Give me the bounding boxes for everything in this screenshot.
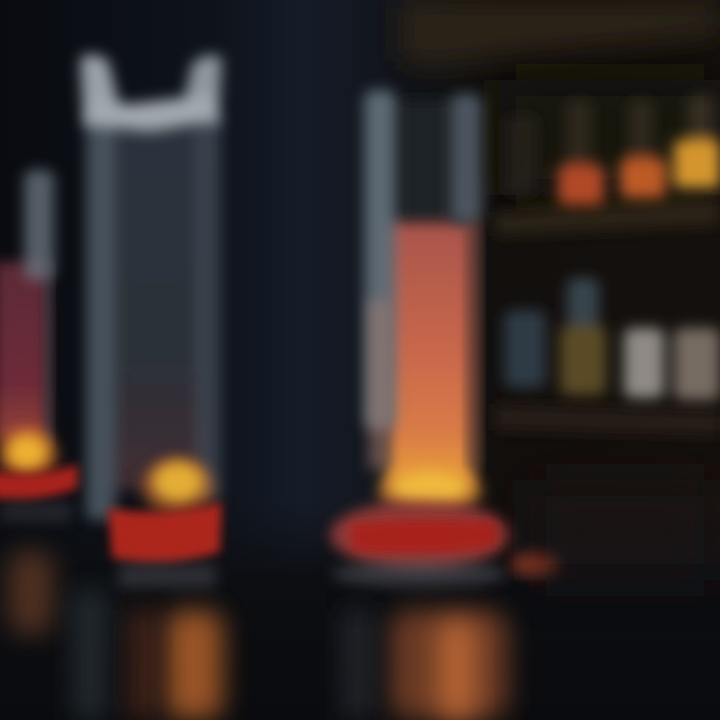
panel: right cylinder — [330, 90, 559, 587]
floor surface — [0, 500, 720, 720]
panel: left cylinder — [0, 170, 78, 522]
panel: upper shelf bottles — [505, 95, 720, 205]
panel: lower shelf bottles — [504, 278, 720, 400]
panel: shelves — [400, 0, 720, 436]
rim — [80, 54, 222, 132]
panel: table reflections — [8, 480, 720, 720]
panel: middle cylinder — [80, 54, 222, 588]
